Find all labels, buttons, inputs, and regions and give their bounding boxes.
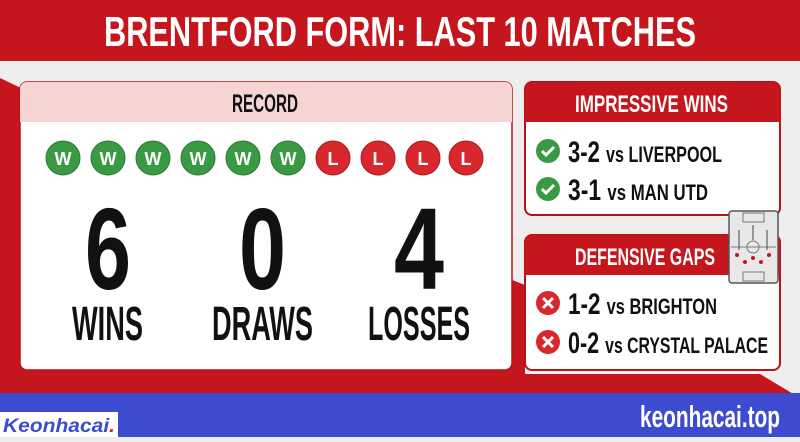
win row 2: 3-1 vs MAN UTD <box>568 174 708 207</box>
win row 2 <box>536 174 708 207</box>
win row 1 <box>536 136 722 169</box>
panel: defensive gaps <box>525 235 780 370</box>
logo: Keonhacai . <box>3 416 115 437</box>
panel: defensive gaps: DEFENSIVE GAPS <box>575 244 715 271</box>
form circles: W <box>100 149 116 169</box>
stat: wins <box>72 184 143 351</box>
form circles: W <box>280 149 296 169</box>
icon: tactics pitch <box>729 211 778 283</box>
panel: impressive wins: IMPRESSIVE WINS <box>575 91 728 118</box>
form circles: L <box>328 149 338 169</box>
form circles <box>46 141 483 175</box>
stat: losses <box>368 184 470 351</box>
stat: draws: 0 <box>239 184 286 314</box>
stat: draws <box>212 184 313 351</box>
form circles: W <box>54 149 72 169</box>
stat: wins: WINS <box>72 298 143 351</box>
win row 1: 3-2 vs LIVERPOOL <box>568 136 722 169</box>
loss row 1: 1-2 vs BRIGHTON <box>568 288 717 321</box>
form circles: L <box>418 149 428 169</box>
form circles: L <box>372 149 384 169</box>
title <box>0 0 800 61</box>
stat: draws: DRAWS <box>212 298 313 351</box>
stat: wins: 6 <box>85 184 131 314</box>
panel: impressive wins <box>525 82 780 215</box>
form circles: W <box>144 149 162 169</box>
loss row 1 <box>536 288 717 321</box>
stat: losses: 4 <box>394 184 444 314</box>
form circles: L <box>460 149 472 169</box>
form circles: W <box>190 149 206 169</box>
stat: losses: LOSSES <box>368 298 470 351</box>
panel: record <box>20 82 512 370</box>
form circles: W <box>234 149 252 169</box>
footer <box>0 393 800 437</box>
heading: record: RECORD <box>232 90 298 118</box>
